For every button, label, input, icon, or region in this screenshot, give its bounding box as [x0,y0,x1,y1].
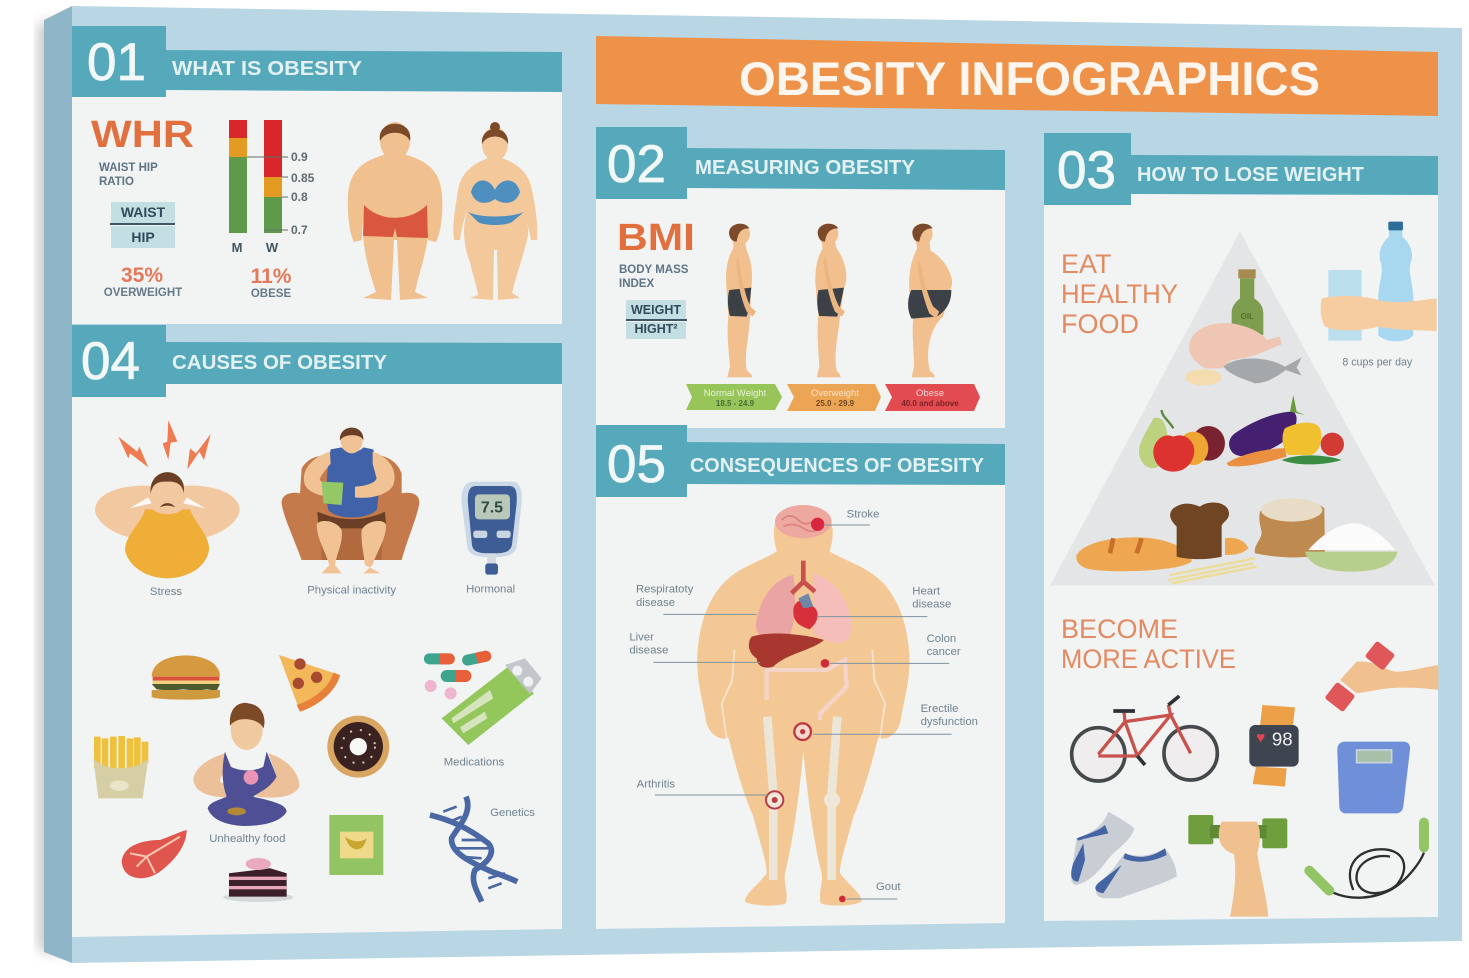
condition labels: disease [629,645,668,657]
label: genetics: Genetics [490,807,535,819]
icon: eating woman [193,703,299,826]
BMI description: BODY MASS [619,264,689,276]
figure: obese [908,223,952,377]
BMI formula: HIGHT² [634,322,678,336]
section number 03: 03 [1057,141,1116,200]
WHR bar chart: 0.85 [291,171,315,185]
icon: steak [122,830,187,878]
heading: eat healthy food: HEALTHY [1061,279,1178,309]
BMI category: overweight [787,384,881,411]
condition labels: Stroke [847,508,879,520]
WHR bar chart: M [232,240,242,255]
intestine [767,660,847,720]
icon: jump rope [1309,823,1424,898]
icon: bicycle [1072,696,1217,781]
WHR formula: HIP [131,229,155,245]
icon: burger [152,655,220,700]
WHR title: WHR [91,114,194,156]
heading: measuring obesity: MEASURING OBESITY [695,157,916,179]
icon: smart watch [1249,705,1299,787]
icon: smart watch: ♥ [1256,730,1265,747]
BMI category: obese: 40.0 and above [901,399,959,408]
condition labels: Arthritis [637,778,675,790]
knee joints [766,791,840,809]
figure: normal weight [726,223,756,377]
condition labels: dysfunction [921,716,978,728]
heading: eat healthy food: EAT [1061,249,1112,279]
stat: 35% overweight: 35% [121,264,163,287]
section number 05: 05 [607,435,666,494]
condition labels: Heart [912,585,941,597]
BMI formula: WEIGHT [631,303,681,317]
stat: 11% obese [251,265,292,300]
panel: 02 measuring obesity [596,127,1005,428]
icon: dna genetics [430,797,517,902]
condition labels: disease [912,599,951,611]
label: hormonal: Hormonal [466,583,515,595]
hand holding water [1321,296,1437,331]
icon: running shoes [1071,812,1177,898]
WHR bar chart [229,120,315,255]
bones [767,717,837,880]
label: 8 cups per day: 8 cups per day [1342,357,1413,369]
WHR bar chart: 0.8 [291,190,308,204]
leader lines [653,525,952,899]
fish [1223,358,1302,383]
oil bottle [1232,269,1263,335]
brain [775,505,832,538]
title banner: OBESITY INFOGRAPHICS [739,52,1320,105]
body diagram [629,505,978,906]
icon: bathroom scale [1337,742,1410,813]
icon: obese woman [453,122,537,300]
WHR formula [110,202,175,248]
title banner [596,36,1438,116]
heading: what is obesity: WHAT IS OBESITY [172,58,363,80]
BMI category: normal weight: Normal Weight [704,388,767,399]
icon: cake [223,858,293,902]
condition labels: Gout [876,881,901,893]
section number 01: 01 [87,33,146,92]
causes: food, medications, genetics [93,650,542,902]
label: unhealthy food: Unhealthy food [209,833,285,845]
heading: eat healthy food: FOOD [1061,309,1139,339]
heading: consequences of obesity: CONSEQUENCES OF OBESITY [690,455,985,477]
trachea [792,561,815,593]
gout marker [839,896,846,902]
WHR description: RATIO [99,176,134,188]
bread and grains [1076,498,1398,583]
body silhouette [697,505,909,906]
WHR bar chart: 0.7 [291,223,308,237]
panel: 05 consequences of obesity [596,425,1005,929]
chicken [1189,323,1282,368]
lungs [756,573,852,643]
icon: physical inactivity [282,428,419,573]
BMI formula [626,300,687,339]
condition labels: Respiratoty [636,584,694,596]
reproductive marker [794,723,811,740]
condition labels [629,508,978,893]
panel: 04 causes of obesity [72,325,562,937]
icon: hand with red dumbbell [1324,641,1438,712]
figure: overweight [815,223,846,377]
liver [749,633,824,668]
icon: fries [93,736,148,798]
condition labels: cancer [927,646,961,658]
BMI category: normal weight: 18.5 - 24.9 [716,399,755,408]
icon: chips bag [329,815,383,875]
condition labels: disease [636,597,675,609]
icon: obese man [348,122,442,300]
icon: smart watch: 98 [1272,729,1293,750]
egg [1185,369,1222,385]
label: physical inactivity: Physical inactivity [307,584,396,596]
glass of water [1328,270,1362,341]
condition labels: Colon [927,633,956,645]
BMI category: normal weight [686,384,782,410]
icon: glucometer: 7.5 [481,500,503,517]
icon: donut [327,716,389,778]
water bottle [1378,222,1413,341]
WHR formula: WAIST [121,204,166,220]
causes: stress, inactivity, hormonal [95,420,522,598]
icon: stress [95,420,240,578]
WHR description: WAIST HIP [99,162,158,174]
BMI category: obese [885,384,980,411]
panel: 03 how to lose weight [1044,133,1438,921]
label: medications: Medications [444,756,505,768]
icon: hand with green dumbbell [1188,815,1287,917]
section number 04: 04 [81,332,140,391]
heart [793,593,818,629]
panel: 01 what is obesity [72,26,562,324]
pyramid [1050,232,1435,586]
section number 02: 02 [607,135,666,194]
condition labels: Liver [629,632,654,644]
heading: causes of obesity: CAUSES OF OBESITY [172,352,388,374]
label: stress: Stress [150,586,182,598]
stat: 35% overweight [104,264,182,299]
stat: 11% obese: 11% [251,265,292,288]
stat: 11% obese: OBESE [251,288,291,300]
WHR bar chart: 0.9 [291,150,308,164]
activity icons [1071,641,1438,917]
BMI title: BMI [617,217,695,259]
heading: how to lose weight: HOW TO LOSE WEIGHT [1137,164,1364,186]
heading: become more active: BECOME [1061,614,1178,644]
heading: become more active: MORE ACTIVE [1061,644,1236,674]
BMI category: overweight: 25.0 - 29.9 [816,399,855,408]
BMI description: INDEX [619,278,654,290]
BMI category: overweight: Overweight [811,388,859,399]
stat: 35% overweight: OVERWEIGHT [104,287,182,299]
oil bottle: OIL [1241,312,1254,321]
colon tumour [821,659,829,668]
condition labels: Erectile [921,703,958,715]
icon: medications [424,650,542,745]
icon: pizza [279,655,340,712]
BMI category: obese: Obese [916,388,944,399]
food pyramid and hydration [1050,222,1437,586]
vegetables [1139,395,1344,472]
WHR bar chart: W [266,240,279,255]
BMI body figures [726,223,952,377]
icon: glucometer [461,482,522,575]
